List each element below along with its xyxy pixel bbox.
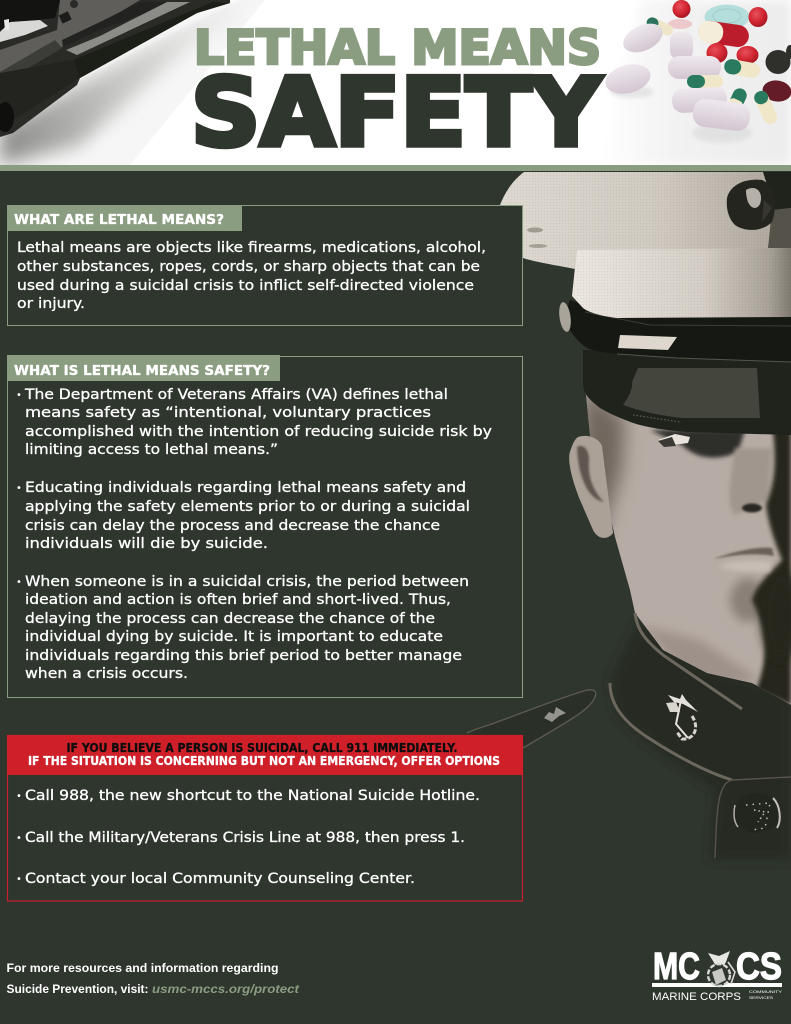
hat crown — [500, 172, 791, 269]
title: safety: SAFETY — [191, 59, 602, 168]
text block: suicidal crisis period: individuals regarding this brief period to better manage — [25, 648, 462, 664]
footer resources text: For more resources and information regarding — [6, 963, 278, 975]
logo: MCCS: MARINE CORPS — [652, 991, 741, 1003]
eye — [658, 434, 690, 445]
photo: marine in dress uniform — [467, 172, 791, 860]
logo: MCCS: COMMUNITY — [749, 989, 782, 994]
callout: red emergency banner — [7, 735, 523, 775]
panel: crisis options — [7, 735, 523, 901]
text block: suicidal crisis period: individual dying by suicide. It is important to educate — [25, 629, 443, 645]
tunic — [610, 620, 791, 860]
text block: definition: Lethal means are objects like firearms, medications, alcohol, — [17, 240, 486, 256]
text block: crisis line: • — [16, 833, 22, 844]
text block: call 988: Call 988, the new shortcut to the National Suicide Hotline. — [25, 788, 480, 804]
heading: what is lethal means safety — [7, 355, 280, 381]
text block: definition: other substances, ropes, cords, or sharp objects that can be — [17, 259, 480, 275]
gun surface shadow — [0, 0, 265, 165]
text block: educating individuals: applying the safety elements prior to or during a suicidal — [25, 499, 470, 515]
heading: what are lethal means — [7, 205, 242, 231]
header divider band — [0, 165, 791, 171]
neck shading — [646, 626, 756, 682]
hat chin strap — [564, 300, 791, 362]
text block: educating individuals: individuals will die by suicide. — [25, 536, 268, 552]
text block: call 988: • — [16, 791, 22, 802]
icon: eagle globe and anchor — [708, 951, 735, 986]
header banner — [0, 0, 791, 165]
text block: suicidal crisis period: ideation and action is often brief and short-lived. Thus, — [25, 592, 451, 608]
icon: pills — [602, 0, 791, 143]
text block: VA definition: • — [16, 390, 22, 401]
right table surface — [648, 0, 791, 165]
text block: VA definition: The Department of Veterans Affairs (VA) defines lethal — [24, 387, 448, 403]
text block: suicidal crisis period: delaying the process can decrease the chance of the — [25, 611, 435, 627]
panel: what is lethal means safety — [7, 355, 522, 698]
chin stubble shading — [730, 578, 766, 622]
callout: red emergency banner: IF YOU BELIEVE A PERSON IS SUICIDAL, CALL 911 IMMEDIATELY. — [66, 741, 458, 755]
tunic front edge — [715, 777, 791, 858]
text block: definition — [17, 240, 486, 312]
text block: VA definition — [16, 387, 492, 458]
visor stitching — [633, 415, 680, 422]
face and neck — [575, 385, 791, 705]
visor reflection — [623, 368, 760, 418]
icon: hat emblem — [727, 172, 791, 248]
text block: definition: used during a suicidal crisis to inflict self-directed violence — [17, 278, 474, 294]
right dark face — [752, 430, 791, 705]
text block: suicidal crisis period: • — [16, 577, 22, 588]
hat strap button — [557, 301, 573, 333]
heading: what are lethal means: WHAT ARE LETHAL MEANS? — [14, 213, 224, 228]
text block: VA definition: limiting access to lethal means.” — [25, 442, 278, 458]
logo: MCCS: MC — [653, 946, 700, 988]
capsule top-left — [646, 17, 673, 36]
text block: suicidal crisis period — [16, 574, 469, 682]
logo: MCCS — [652, 946, 782, 1003]
footer resources text — [6, 963, 300, 996]
footer resources text: usmc-mccs.org/protect — [152, 984, 300, 996]
heading: what is lethal means safety: WHAT IS LETHAL MEANS SAFETY? — [14, 364, 270, 379]
text block: counseling center: Contact your local Community Counseling Center. — [25, 871, 415, 887]
footer resources text: Suicide Prevention, visit: — [6, 984, 148, 996]
temple shading — [586, 394, 635, 530]
text block: VA definition: means safety as “intentional, voluntary practices — [25, 405, 431, 421]
eye socket shadow — [650, 430, 745, 458]
icon: tunic button — [734, 793, 780, 833]
text block: VA definition: accomplished with the intention of reducing suicide risk by — [25, 424, 492, 440]
text block: educating individuals: Educating individuals regarding lethal means safety and — [25, 480, 466, 496]
text block: educating individuals: • — [16, 483, 22, 494]
callout: red emergency banner: IF THE SITUATION IS CONCERNING BUT NOT AN EMERGENCY, OFFER OPTIONS — [28, 754, 500, 768]
text block: educating individuals — [16, 480, 470, 552]
text block: counseling center: • — [16, 874, 22, 885]
shoulder epaulette — [467, 690, 596, 748]
logo: MCCS: SERVICES — [749, 995, 773, 1000]
text block: suicidal crisis period: when a crisis occurs. — [25, 666, 188, 682]
logo: MCCS: CS — [736, 946, 782, 988]
text block: educating individuals: crisis can delay the process and decrease the chance — [25, 518, 440, 534]
ear — [569, 436, 613, 538]
nostril — [742, 504, 762, 512]
hat visor — [583, 350, 791, 435]
hat band — [572, 248, 791, 318]
text block: crisis line: Call the Military/Veterans Crisis Line at 988, then press 1. — [25, 830, 465, 846]
nose bridge — [729, 448, 772, 515]
text block: suicidal crisis period: When someone is in a suicidal crisis, the period between — [25, 574, 469, 590]
title: lethal means: LETHAL MEANS — [194, 21, 601, 76]
collar piping — [635, 613, 742, 709]
panel: what are lethal means — [7, 205, 522, 326]
icon: collar emblem — [666, 694, 698, 739]
lips — [713, 548, 774, 559]
icon: handgun — [0, 0, 230, 137]
capsule red white — [698, 20, 749, 47]
pill shadows — [668, 19, 692, 29]
icon: epaulette emblem — [544, 707, 566, 722]
text block: definition: or injury. — [17, 296, 85, 312]
